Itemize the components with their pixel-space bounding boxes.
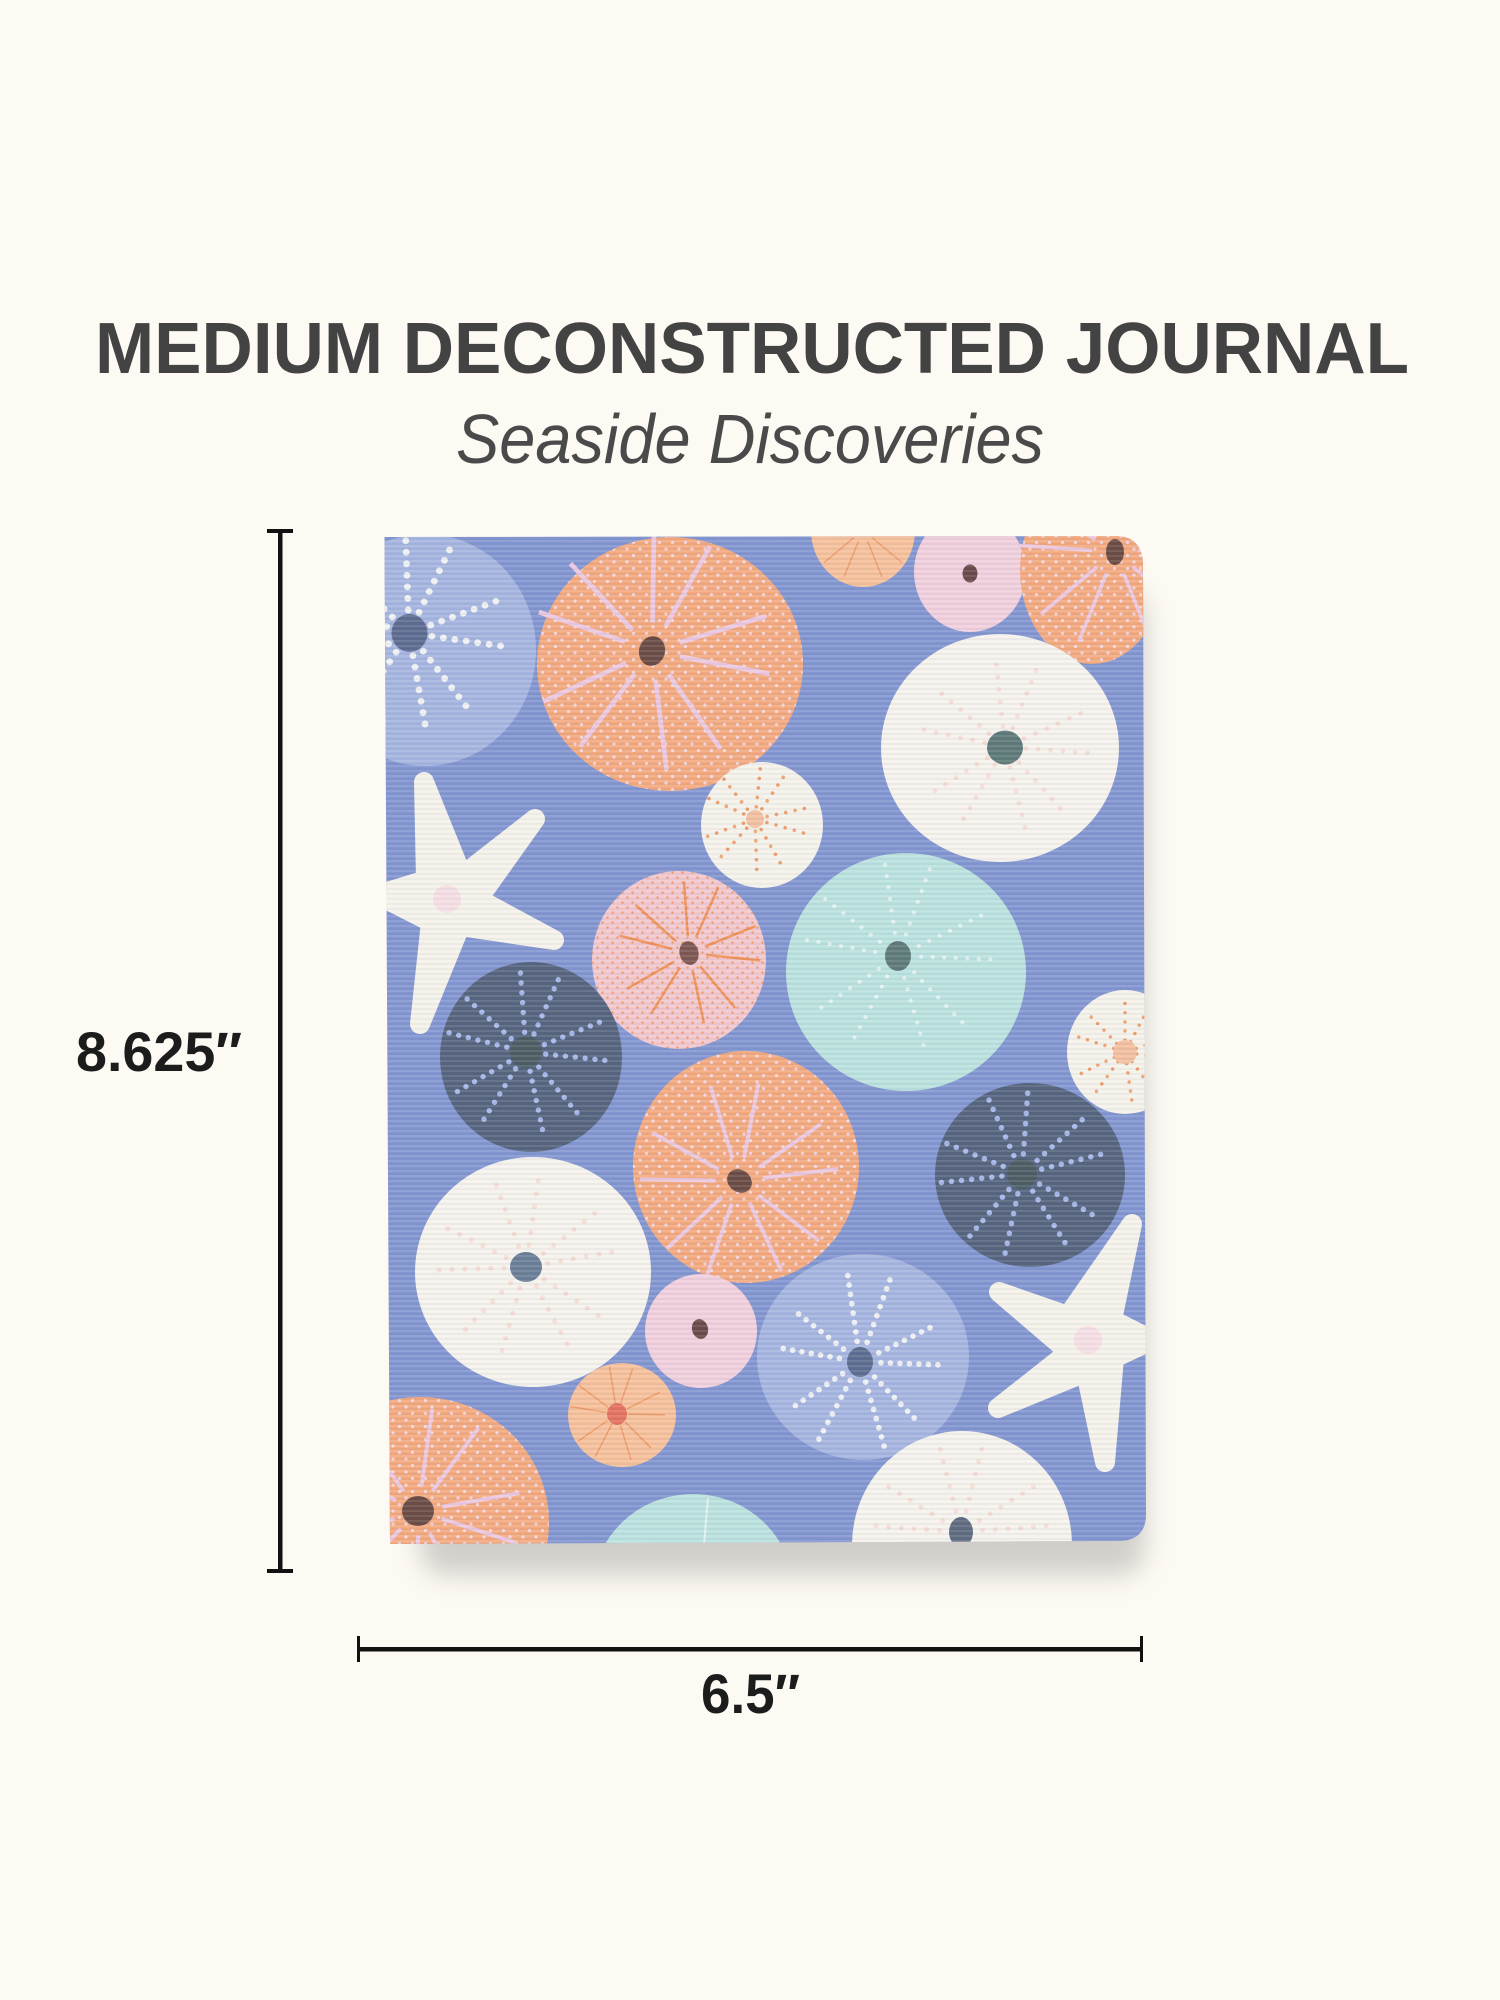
urchin: mint bottom — [606, 1494, 780, 1543]
width dimension marker — [357, 1636, 1143, 1662]
urchin: lavender centre — [757, 1254, 969, 1460]
urchin: orange centre — [633, 1051, 859, 1283]
urchin: orange bottom left — [389, 1397, 549, 1544]
title: MEDIUM DECONSTRUCTED JOURNAL — [95, 309, 1409, 389]
starfish: left — [378, 782, 554, 1024]
urchin: top pink — [914, 536, 1022, 632]
urchin: lavender top left — [384, 536, 536, 766]
urchin: large white top right — [881, 634, 1119, 862]
urchin: right white dotted — [1067, 990, 1145, 1114]
urchin: top small orange — [811, 536, 915, 587]
urchin: dark navy left — [431, 959, 622, 1152]
urchin: pink with orange spokes — [592, 871, 772, 1049]
urchin: dark navy right — [925, 1078, 1125, 1267]
height label: 8.625″ — [76, 1020, 242, 1083]
urchin: large white bottom left — [415, 1157, 651, 1387]
urchin: small pink — [645, 1274, 757, 1388]
urchin: small white with orange dots — [701, 762, 823, 888]
urchin: white bottom right — [852, 1431, 1072, 1542]
urchin: top right orange — [1019, 536, 1144, 664]
journal cover — [384, 536, 1146, 1544]
urchin: large orange — [537, 536, 803, 791]
subtitle: Seaside Discoveries — [456, 400, 1044, 478]
urchin: mint — [786, 853, 1026, 1091]
book shadow — [420, 590, 1145, 1575]
height dimension marker — [267, 529, 293, 1573]
fabric weave texture — [380, 530, 1150, 1550]
starfish: right — [998, 1224, 1152, 1462]
urchin: small orange — [566, 1363, 676, 1467]
width label: 6.5″ — [701, 1662, 800, 1725]
